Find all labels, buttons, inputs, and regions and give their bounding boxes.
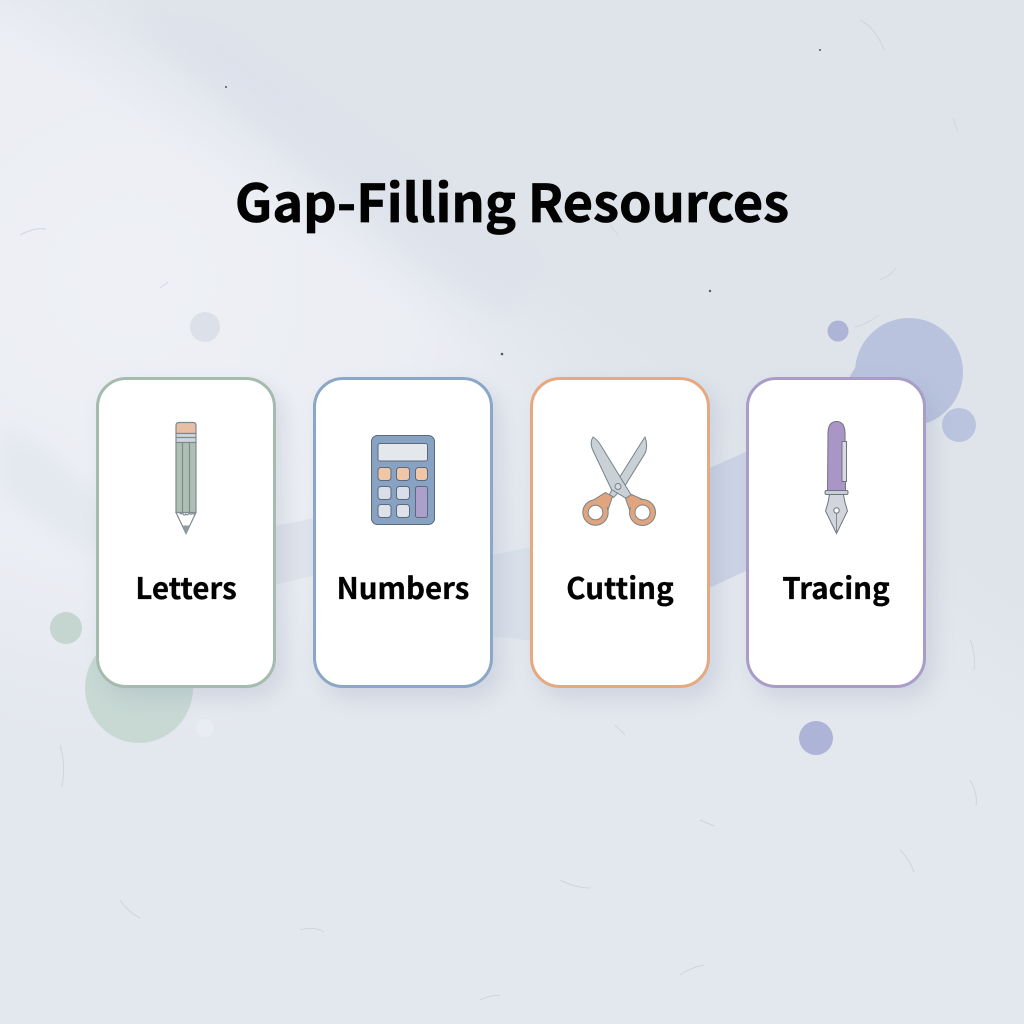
label: Letters: Letters <box>135 566 237 608</box>
panel: letters <box>96 377 276 688</box>
ribbon behind cards <box>270 450 750 641</box>
paper specks <box>225 49 821 355</box>
icon: fountain pen <box>824 421 848 534</box>
panel: cutting <box>530 377 710 688</box>
label: Cutting: Cutting <box>566 566 674 608</box>
handle: right <box>626 494 650 512</box>
label: Tracing: Tracing <box>782 566 890 608</box>
panel: numbers <box>313 377 493 688</box>
handle: left <box>590 492 612 512</box>
blade: top left <box>591 437 632 498</box>
label: Numbers: Numbers <box>337 566 469 608</box>
icon: calculator <box>371 435 435 525</box>
panel: tracing <box>746 377 926 688</box>
title: Gap-Filling Resources <box>235 162 789 238</box>
small decorative circles <box>50 312 976 755</box>
icon: pencil <box>175 422 197 535</box>
blade: top right <box>610 437 647 498</box>
bottom-left green blob <box>85 633 193 743</box>
faint light dot <box>196 719 214 737</box>
icon: scissors <box>582 436 656 526</box>
top-right purple blob <box>849 318 963 426</box>
